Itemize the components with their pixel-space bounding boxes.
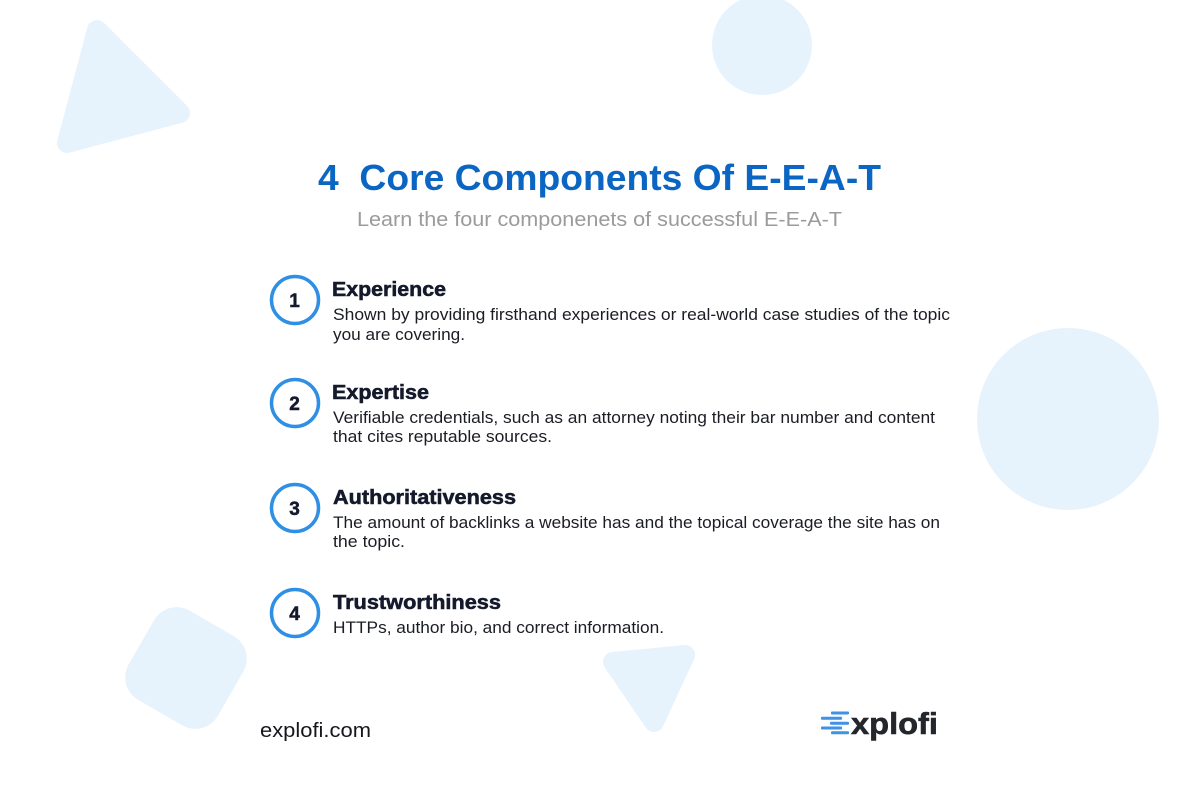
- background shape: circle top: [712, 0, 812, 95]
- description: Expertise: [333, 408, 935, 446]
- number badge 4: [272, 590, 318, 636]
- number badge 1: 1: [289, 291, 300, 312]
- description: Expertise: that cites reputable sources.: [333, 427, 552, 446]
- title: 4 Core Components Of E-E-A-T: [318, 157, 881, 198]
- description: Authoritativeness: The amount of backlinks a website has and the topical coverage the site has on: [333, 513, 940, 532]
- description: Authoritativeness: [333, 513, 940, 551]
- subtitle: Learn the four componenets of successful E-E-A-T: [357, 208, 842, 231]
- description: Experience: [333, 305, 950, 344]
- description: Experience: you are covering.: [333, 325, 465, 344]
- heading: Authoritativeness: Authoritativeness: [333, 487, 516, 509]
- number badge 2: [272, 380, 318, 426]
- footer website: explofi.com: [260, 719, 371, 742]
- description: Experience: Shown by providing firsthand experiences or real-world case studies of the topic: [333, 305, 950, 324]
- number badge 3: [272, 484, 318, 532]
- list item 1: Experience: [272, 276, 950, 344]
- logo: explofi: [821, 706, 938, 741]
- number badge 2: 2: [289, 394, 300, 415]
- number badge 1: [272, 276, 318, 324]
- logo icon: stacked bars: [821, 712, 849, 734]
- background shape: triangle bottom: [613, 655, 685, 722]
- heading: Experience: Experience: [332, 279, 446, 301]
- list item 4: Trustworthiness: [272, 590, 664, 637]
- background shape: circle right: [977, 328, 1159, 510]
- heading: Trustworthiness: Trustworthiness: [333, 592, 501, 614]
- number badge 3: 3: [289, 499, 300, 520]
- list item 2: Expertise: [272, 380, 935, 446]
- background shape: triangle top left: [67, 30, 180, 143]
- logo wordmark: xplofi: [851, 706, 938, 741]
- description: Trustworthiness: HTTPs, author bio, and correct information.: [333, 618, 664, 637]
- heading: Expertise: Expertise: [332, 382, 429, 404]
- number badge 4: 4: [289, 604, 300, 625]
- description: Expertise: Verifiable credentials, such as an attorney noting their bar number and content: [333, 408, 935, 427]
- background shape: rounded square bottom left: [116, 598, 256, 738]
- list item 3: Authoritativeness: [272, 484, 940, 551]
- description: Authoritativeness: the topic.: [333, 532, 405, 551]
